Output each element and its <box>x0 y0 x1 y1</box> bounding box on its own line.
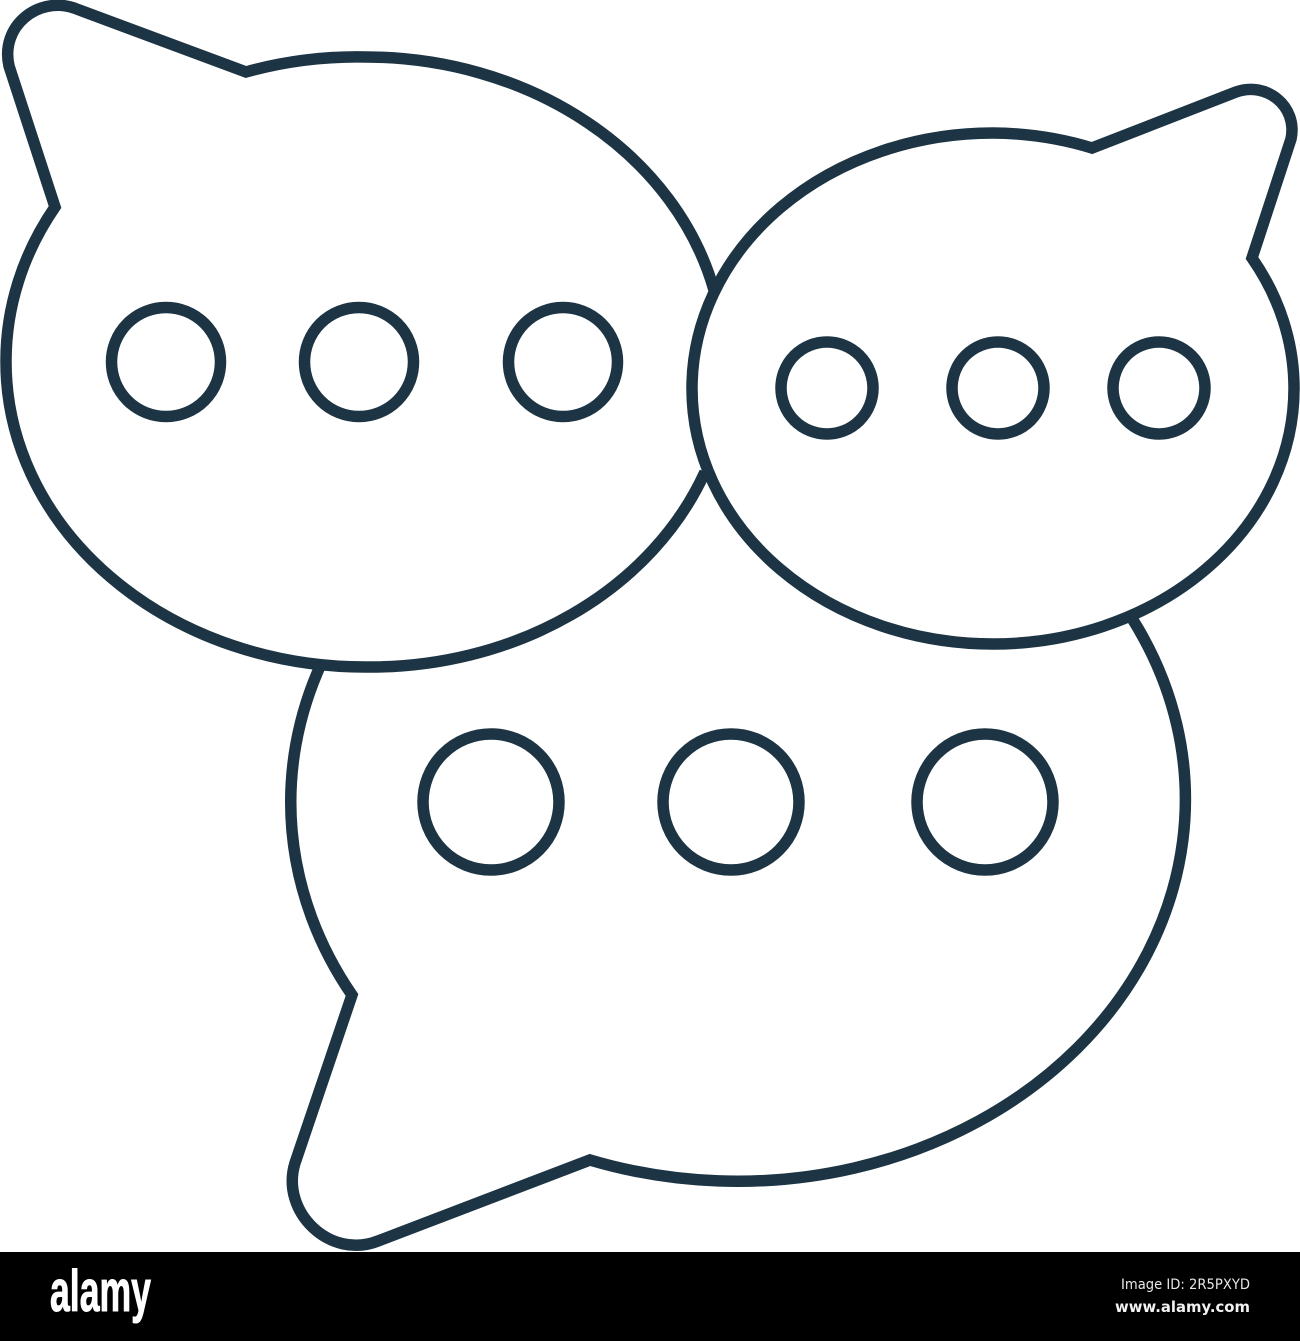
watermark footer bar <box>0 1252 1300 1341</box>
dots: top left bubble <box>112 308 618 416</box>
dots: top right bubble <box>781 342 1205 434</box>
dots: bottom bubble <box>423 734 1053 870</box>
image id: Image ID: 2R5PXYD <box>1121 1277 1250 1293</box>
logo wordmark: alamy: alamy <box>50 1259 151 1324</box>
speech bubble: bottom <box>291 620 1185 1245</box>
speech bubble: top left <box>6 5 714 667</box>
speech bubble: top right <box>692 89 1294 644</box>
website url: www.alamy.com <box>1115 1298 1250 1316</box>
